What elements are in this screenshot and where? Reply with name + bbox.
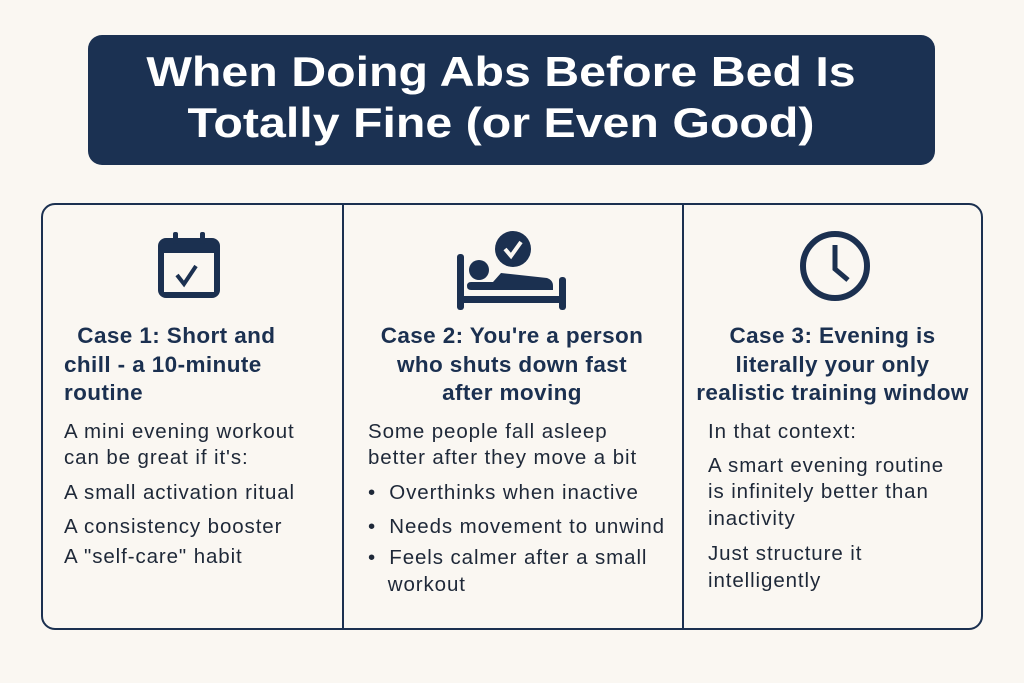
text: case 2 body: better after they move a bit	[368, 446, 637, 469]
heading: case 3: Case 3: Evening is	[729, 323, 936, 348]
heading: case 2: after moving	[442, 380, 582, 405]
title text	[146, 48, 856, 146]
heading: case 1	[64, 323, 275, 405]
heading: case 2: who shuts down fast	[397, 352, 627, 376]
text: case 3 body: intelligently	[708, 569, 821, 592]
heading: case 1: chill - a 10-minute	[64, 352, 262, 376]
text: case 2 body	[368, 420, 665, 596]
text: case 2 body: • Needs movement to unwind	[368, 515, 665, 538]
text: case 1 body: A mini evening workout	[64, 420, 295, 443]
heading: case 1: Case 1: Short and	[77, 323, 275, 348]
heading: case 2: Case 2: You're a person	[381, 323, 643, 348]
title banner	[88, 35, 935, 165]
text: case 2 body: • Overthinks when inactive	[368, 481, 639, 504]
heading: case 3: realistic training window	[696, 380, 969, 405]
heading: case 3: literally your only	[736, 352, 929, 376]
text: case 1 body	[64, 420, 295, 568]
text: case 1 body: A small activation ritual	[64, 481, 295, 504]
text: case 1 body: A "self-care" habit	[64, 545, 243, 568]
heading: case 1: routine	[64, 380, 143, 405]
text: case 3 body: A smart evening routine	[708, 454, 944, 477]
heading: case 3	[696, 323, 969, 405]
text: case 2 body: workout	[388, 573, 466, 596]
text: case 3 body: In that context:	[708, 420, 857, 443]
icon: calendar	[158, 232, 220, 298]
icon: clock	[800, 231, 870, 301]
cases panel	[41, 203, 983, 630]
heading: case 2	[381, 323, 643, 405]
text: case 1 body: A consistency booster	[64, 515, 282, 538]
text: case 1 body: can be great if it's:	[64, 446, 249, 469]
text: case 3 body: inactivity	[708, 507, 796, 530]
title text: When Doing Abs Before Bed Is	[146, 48, 856, 95]
text: case 2 body: Some people fall asleep	[368, 420, 608, 443]
text: case 3 body	[708, 420, 944, 592]
title text: Totally Fine (or Even Good)	[187, 99, 815, 146]
icon: bed with check	[457, 231, 566, 310]
text: case 3 body: Just structure it	[708, 542, 862, 565]
text: case 3 body: is infinitely better than	[708, 480, 929, 503]
text: case 2 body: • Feels calmer after a small	[368, 546, 647, 569]
